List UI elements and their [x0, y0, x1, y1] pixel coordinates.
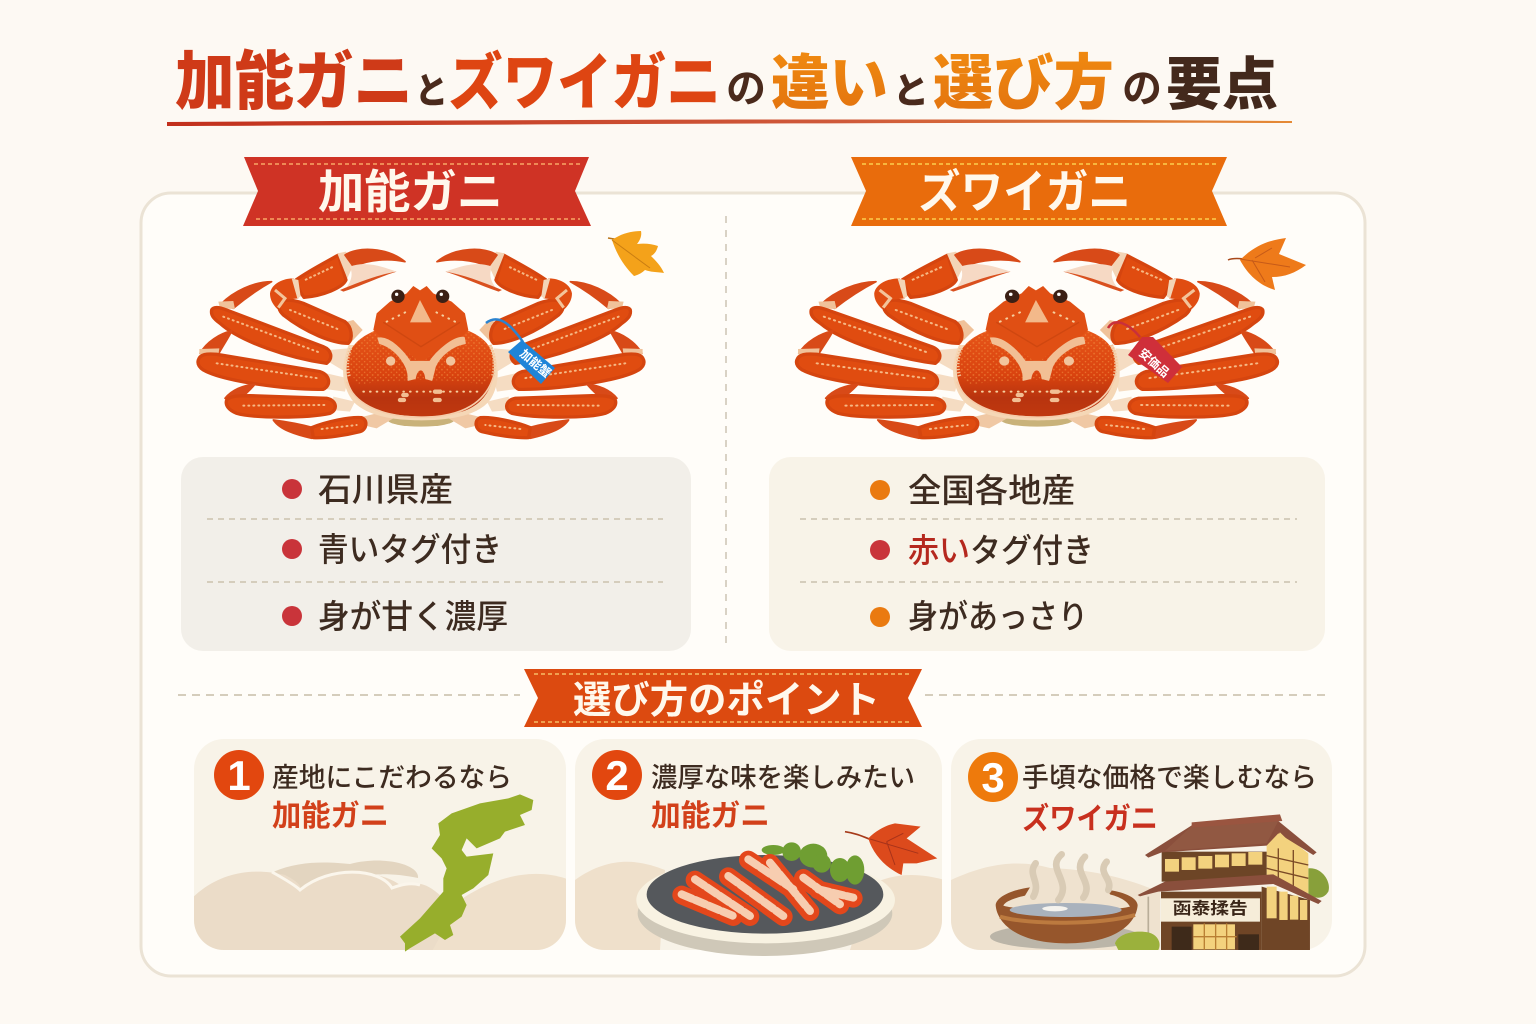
ribbon: ズワイガニ	[851, 157, 1227, 226]
main panel	[141, 193, 1365, 976]
title: 要点	[1166, 53, 1278, 117]
feature: taste: 身が甘く濃厚	[318, 598, 508, 635]
icon: blue tag: 加能蟹	[517, 346, 554, 380]
feature: taste: 身があっさり	[908, 598, 1088, 635]
text: point 1: 産地にこだわるなら	[272, 763, 512, 793]
text: point 2	[651, 763, 915, 833]
ribbon: 加能ガニ	[243, 157, 591, 226]
icon: blue tag	[486, 319, 555, 384]
badge: 3	[968, 752, 1018, 802]
text: point 2: 加能ガニ	[651, 800, 770, 833]
icon: red tag	[1108, 322, 1182, 383]
title: ズワイガニ	[448, 48, 721, 118]
illustration: ryokan building	[1115, 814, 1329, 950]
illustration: hot spring bath	[990, 854, 1140, 949]
ribbon: 選び方のポイント: 選び方のポイント	[573, 680, 880, 722]
title: 選び方	[933, 50, 1114, 117]
title: 違い	[771, 50, 888, 117]
text: point 3: 手頃な価格で楽しむなら	[1022, 763, 1317, 793]
text: point 3	[1022, 763, 1317, 836]
map: Ishikawa prefecture	[400, 794, 533, 952]
badge: 2	[592, 750, 642, 800]
icon: orange leaf	[1228, 238, 1306, 290]
ribbon: ズワイガニ: ズワイガニ	[918, 166, 1131, 218]
title: と	[415, 70, 448, 111]
icon: red maple leaf	[845, 823, 937, 875]
title: の	[1122, 67, 1162, 111]
illustration: ryokan building: 函泰揉告	[1173, 899, 1248, 918]
badge: 3: 3	[981, 754, 1005, 801]
icon: yellow leaf	[608, 231, 664, 276]
feature: origin: 全国各地産	[908, 472, 1075, 509]
illustration: crab meat plate	[636, 842, 895, 956]
title: の	[726, 67, 766, 111]
title	[175, 46, 1278, 118]
illustration: ズワイガニ crab	[797, 249, 1277, 438]
feature: tag: 赤いタグ付き	[908, 532, 1094, 569]
ribbon: 選び方のポイント	[524, 669, 922, 727]
feature: origin: 石川県産	[318, 471, 453, 508]
text: point 2: 濃厚な味を楽しみたい	[651, 763, 915, 793]
badge: 2: 2	[605, 752, 629, 799]
title underline	[167, 119, 1292, 126]
panel: ズワイガニ features	[769, 457, 1325, 651]
feature: tag: 青いタグ付き	[318, 531, 502, 568]
panel: point 3	[951, 739, 1332, 950]
title: 加能ガニ	[175, 46, 413, 118]
badge: 1: 1	[227, 752, 251, 799]
text: point 1: 加能ガニ	[272, 800, 389, 833]
ribbon: 加能ガニ: 加能ガニ	[318, 166, 503, 218]
panel: point 2	[575, 739, 945, 956]
illustration: 加能ガニ crab	[198, 249, 644, 438]
panel: 加能ガニ features	[181, 457, 691, 651]
badge: 1	[214, 750, 264, 800]
icon: red tag: 安価品	[1136, 345, 1173, 380]
title: と	[893, 70, 929, 111]
text: point 3: ズワイガニ	[1022, 802, 1158, 836]
panel: point 1	[190, 739, 570, 955]
text: point 1	[272, 763, 512, 833]
